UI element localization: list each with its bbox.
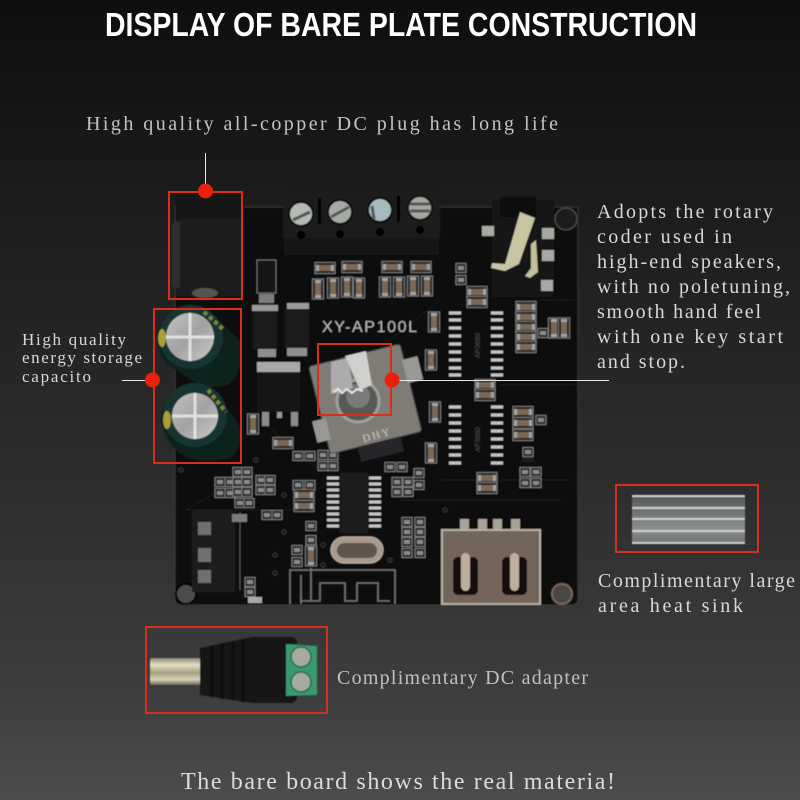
footer caption: The bare board shows the real materia!	[181, 769, 615, 795]
audio jack	[482, 197, 554, 297]
amplifier chip top: AP3660	[475, 333, 482, 358]
caption: rotary encoder: high-end speakers,	[597, 251, 781, 273]
voltage regulator	[257, 362, 300, 426]
amplifier chip bottom: AP3660	[475, 427, 482, 452]
heat sink	[632, 495, 745, 544]
board label XY-AP100L: XY-AP100L	[322, 319, 417, 336]
heat sink box	[616, 485, 758, 552]
PCB antenna	[290, 568, 395, 604]
caption: rotary encoder: coder used in	[597, 226, 732, 248]
caption: rotary encoder: with one key start	[597, 326, 783, 348]
caption: heat sink: Complimentary large	[598, 570, 795, 592]
crystal oscillator	[331, 537, 383, 563]
caption: DC plug: High quality all-copper DC plug has long life	[86, 113, 558, 135]
SMD components	[215, 262, 570, 603]
caption: rotary encoder: smooth hand feel	[597, 301, 761, 323]
caption: heat sink	[598, 570, 795, 617]
callout: DC plug	[169, 153, 242, 299]
caption: rotary encoder: with no poletuning,	[597, 276, 790, 298]
caption: energy storage capacitor: High quality	[22, 330, 126, 349]
DC adapter box	[146, 627, 327, 713]
encoder marking: DHY	[361, 426, 393, 445]
caption: rotary encoder: Adopts the rotary	[597, 201, 773, 223]
caption: DC adapter: Complimentary DC adapter	[337, 667, 588, 689]
caption: energy storage capacitor: energy storage	[22, 348, 142, 367]
side connector	[192, 510, 247, 592]
terminal block	[283, 192, 440, 255]
callout: rotary encoder	[318, 344, 609, 415]
capacitor top	[158, 305, 242, 387]
DC jack	[172, 195, 242, 298]
caption: energy storage capacitor: capacito	[22, 367, 91, 386]
callout: capacitor	[122, 309, 241, 463]
rotary encoder	[299, 341, 439, 471]
power diodes	[252, 303, 309, 357]
capacitor bottom	[161, 383, 241, 461]
mounting holes	[176, 208, 577, 604]
small black diode	[257, 260, 276, 303]
bluetooth chip	[327, 473, 381, 533]
DC adapter	[150, 637, 317, 703]
caption: heat sink: area heat sink	[598, 595, 743, 617]
vias	[179, 458, 447, 575]
amplifier chip bottom	[449, 402, 503, 472]
caption: energy storage capacitor	[22, 330, 142, 386]
title: DISPLAY OF BARE PLATE CONSTRUCTION	[105, 6, 697, 43]
USB port	[442, 519, 540, 604]
caption: rotary encoder	[597, 201, 790, 373]
traces	[186, 300, 575, 510]
caption: rotary encoder: and stop.	[597, 351, 685, 373]
amplifier chip top	[449, 308, 503, 378]
board base	[175, 207, 578, 605]
circuit board	[158, 192, 578, 605]
